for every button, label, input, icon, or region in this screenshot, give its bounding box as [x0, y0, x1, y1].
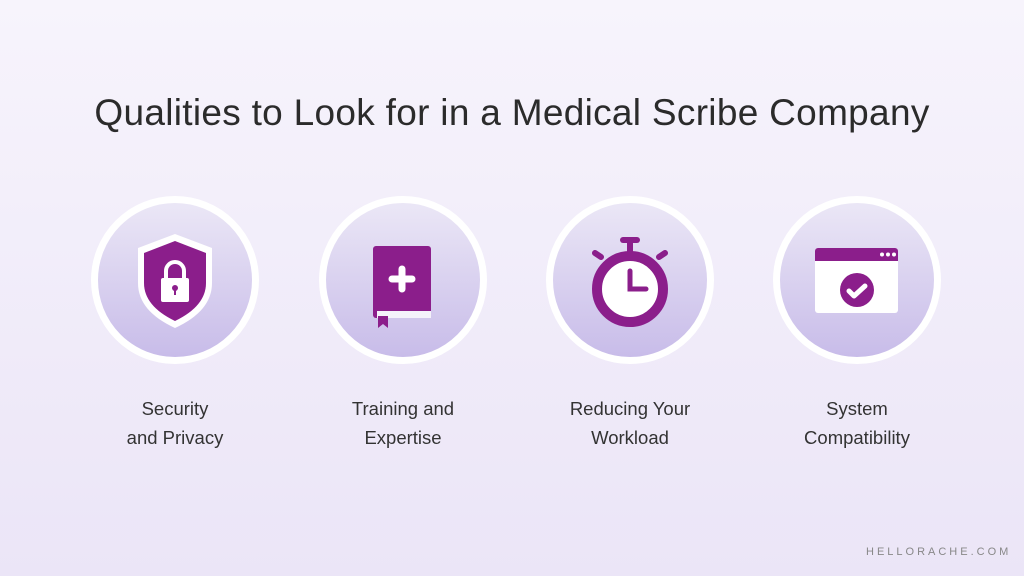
label: training [352, 398, 454, 448]
icon: medical book [319, 196, 487, 364]
label: security: Security [142, 398, 208, 419]
footer: HELLORACHE.COM [866, 546, 1011, 558]
label: workload: Reducing Your [570, 398, 690, 419]
label: compatibility: System [826, 398, 888, 419]
icon: shield lock [91, 196, 259, 364]
label: training: Expertise [364, 427, 442, 448]
label: workload: Workload [591, 427, 669, 448]
label: security: and Privacy [127, 427, 223, 448]
icon: stopwatch [546, 196, 714, 364]
label: training: Training and [352, 398, 454, 419]
label: compatibility [804, 398, 910, 448]
title: Qualities to Look for in a Medical Scribe Company [94, 92, 930, 133]
label: compatibility: Compatibility [804, 427, 910, 448]
icon: browser check [773, 196, 941, 364]
label: security [127, 398, 224, 448]
label: workload [570, 398, 690, 448]
